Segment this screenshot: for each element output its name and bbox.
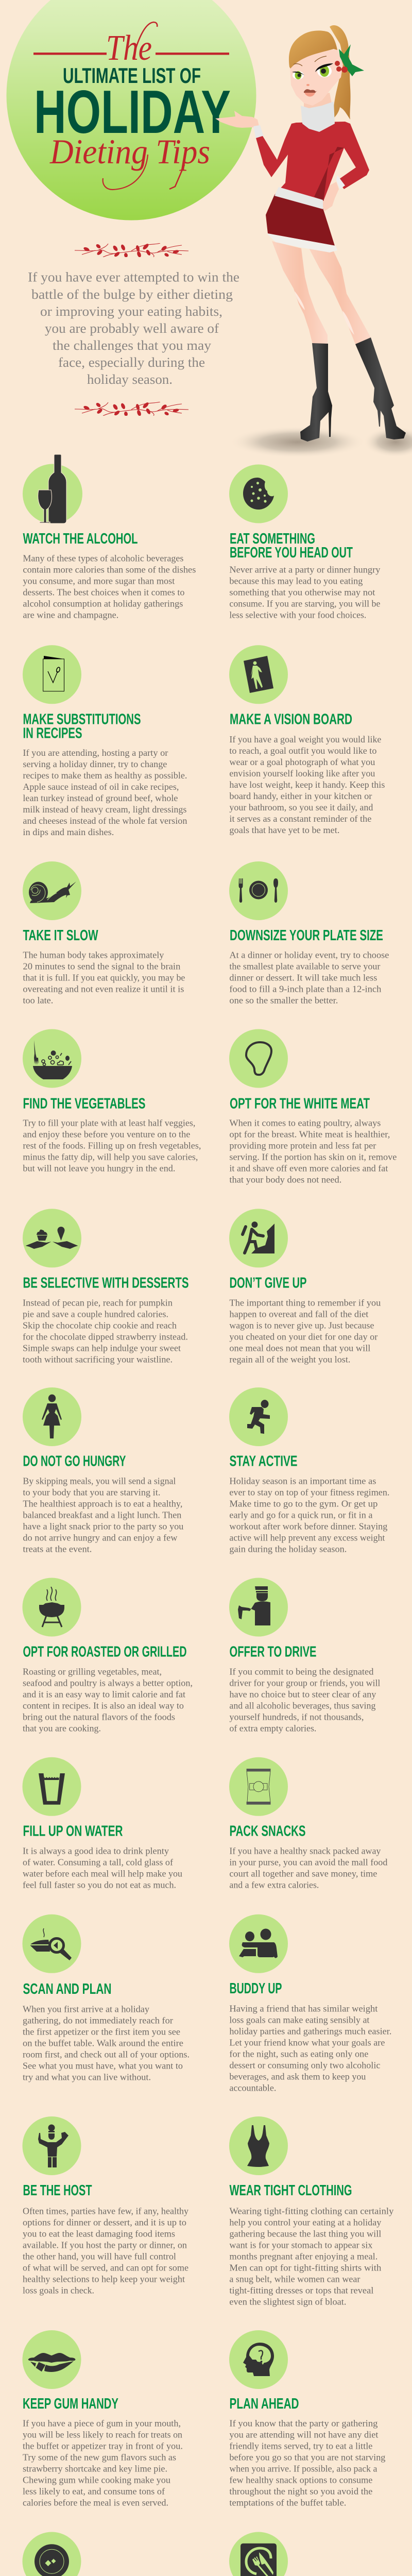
icon: plate with two bites (23, 2532, 81, 2576)
body text: do not arrive hungry and can enjoy a few (23, 1532, 177, 1543)
heading: OPT FOR ROASTED OR GRILLED (23, 1644, 186, 1660)
icon: cookie (229, 465, 288, 523)
intro paragraph: you are probably well aware of (45, 321, 219, 336)
body text: It is always a good idea to drink plenty (23, 1845, 169, 1856)
body text (229, 1666, 380, 1733)
body text: alcohol consumption at holiday gatherings (23, 599, 183, 609)
heading: BEFORE YOU HEAD OUT (230, 545, 353, 561)
neck (304, 93, 332, 108)
panel: take the 2-bite approach (23, 2532, 182, 2576)
body text: on the buffet table. Walk around the entire (23, 2038, 183, 2048)
body text: holiday parties and gatherings much easier. (229, 2026, 391, 2036)
heading (23, 711, 141, 742)
body text (23, 553, 196, 620)
body text: early and go for a quick run, or fit in a (229, 1510, 372, 1520)
body text: lean turkey instead of ground beef, whole (23, 793, 178, 803)
icon: hands with cupcake and ice cream (23, 1209, 81, 1267)
icon: head with brain and question mark (229, 2330, 288, 2389)
heading: DO NOT GO HUNGRY (23, 1453, 126, 1470)
title oval (6, 0, 256, 221)
panel: use a calorie-tracking app (229, 2532, 397, 2576)
body text: and it is an easy way to limit calorie and fat (23, 1689, 185, 1699)
icon: steaming grill (23, 1578, 81, 1636)
body text: the first appetizer or the first item you see (23, 2026, 180, 2037)
body text: less likely to eat, and consume tons of (23, 2486, 165, 2496)
body text: calories before the meal is even served. (23, 2497, 168, 2507)
body text (229, 565, 380, 620)
heading: SCAN AND PLAN (23, 1981, 111, 1997)
body text: happen to overeat and fall of the diet (229, 1309, 368, 1319)
intro paragraph: face, especially during the (58, 355, 205, 370)
body text: you are attending will not have any diet (229, 2429, 378, 2439)
body text (229, 1476, 389, 1554)
body text: The human body takes approximately (23, 950, 164, 960)
body text: have lost weight, keep it handy. Keep this (229, 779, 385, 790)
body text: Let your friend know what your goals are (229, 2037, 385, 2047)
body text (23, 1297, 188, 1364)
panel: buddy up (229, 1914, 391, 2093)
icon: woman silhouette (23, 1387, 81, 1446)
body text: wagon is to never give up. Just because (229, 1320, 374, 1330)
body text: because this may lead to you eating (229, 576, 363, 586)
icon: drumstick outline (229, 1029, 288, 1088)
body text (229, 1297, 381, 1364)
body text: Many of these types of alcoholic beverages (23, 553, 183, 564)
body text: driver for your group or friends, you will (229, 1677, 380, 1688)
heading: DON’T GIVE UP (230, 1275, 307, 1291)
body text (23, 950, 185, 1006)
body text: your bathroom, so you see it daily, and (229, 802, 373, 812)
face (290, 49, 343, 106)
body text: See what you must have, what you want to (23, 2060, 183, 2071)
panel: take it slow (23, 861, 185, 1006)
body text (23, 2206, 188, 2295)
panel: watch the alcohol (23, 454, 196, 620)
body text (23, 2418, 183, 2507)
body text: something that you otherwise may not (229, 587, 375, 598)
panel: make substitutions in recipes (23, 645, 187, 837)
body text: court all together and save money, time (229, 1868, 377, 1878)
body text: Make time to go to the gym. Or get up (229, 1498, 377, 1509)
icon: chauffeur (229, 1578, 288, 1636)
body text: The healthiest approach is to eat a healthy, (23, 1498, 182, 1509)
heading: MAKE SUBSTITUTIONS (23, 711, 141, 728)
body text (229, 2003, 391, 2093)
body text: contain more calories than some of the dishes (23, 565, 196, 575)
heading: FILL UP ON WATER (23, 1823, 123, 1840)
panel: don't give up (229, 1209, 381, 1364)
body text: regain all of the weight you lost. (229, 1354, 350, 1364)
body text: you will be less likely to reach for treats on (23, 2429, 182, 2439)
hair (289, 30, 337, 69)
body text: board handy, either in your kitchen or (229, 791, 372, 801)
body text: water before each meal will help make you (23, 1868, 182, 1878)
heading (230, 531, 353, 561)
panel: stay active (229, 1387, 389, 1554)
body text: If you have a goal weight you would like (229, 734, 381, 744)
body text: when you arrive. If possible, also pack a (229, 2463, 377, 2473)
body text (229, 950, 389, 1006)
body text: Never arrive at a party or dinner hungry (229, 565, 380, 575)
panel: fill up on water (23, 1757, 182, 1890)
body text: a snug belt, while women can wear (229, 2274, 360, 2284)
body text: If you commit to being the designated (229, 1666, 373, 1676)
right hand on hip (322, 182, 339, 211)
heading: BE THE HOST (23, 2182, 92, 2199)
icon: two friends (229, 1914, 288, 1973)
body text: The important thing to remember if you (229, 1297, 381, 1308)
title: The: The (106, 28, 152, 68)
body text (229, 2206, 393, 2307)
body text: serving a holiday dinner, try to change (23, 759, 167, 769)
body text: envision yourself looking like after you (229, 768, 375, 778)
body text: tooth without sacrificing your waistline. (23, 1354, 173, 1364)
panel: find the vegetables (23, 1029, 201, 1174)
body text: Wearing tight-fitting clothing can certainly (229, 2206, 393, 2216)
heading: FIND THE VEGETABLES (23, 1096, 145, 1112)
panel: opt for roasted or grilled (23, 1578, 193, 1733)
body text: If you are attending, hosting a party or (23, 748, 168, 758)
nose and lips (306, 84, 310, 86)
intro paragraph: holiday season. (87, 372, 173, 387)
panel: make a vision board (229, 645, 385, 835)
body text: consume. If you are starving, you will be (229, 599, 380, 609)
icon: tight top (229, 2116, 288, 2175)
panel: do not go hungry (23, 1387, 183, 1554)
body text: options for dinner or dessert, and it is up to (23, 2217, 186, 2227)
illustration: woman in red holiday dress (215, 25, 412, 458)
body text: in your purse, you can avoid the mall food (229, 1857, 387, 1867)
icon: plate with fork and spoon (229, 861, 288, 920)
body text: the buffet or appetizer tray in front of you. (23, 2441, 183, 2451)
body text: When you first arrive at a holiday (23, 2004, 149, 2014)
body text: Roasting or grilling vegetables, meat, (23, 1666, 162, 1676)
body text: If you have a healthy snack packed away (229, 1845, 381, 1856)
body text (229, 2418, 385, 2507)
body text: If you have a piece of gum in your mouth, (23, 2418, 181, 2428)
title block: green oval with title (6, 0, 256, 221)
eyes and brows (317, 65, 332, 77)
body text: Often times, parties have few, if any, healthy (23, 2206, 188, 2216)
body text: At a dinner or holiday event, try to choose (229, 950, 389, 960)
body text: Apple sauce instead of oil in cake recipes, (23, 782, 179, 792)
heading: PACK SNACKS (230, 1823, 306, 1840)
body text: recipes to make them as healthy as possible. (23, 770, 187, 781)
body text: have a light snack prior to the party so you (23, 1521, 183, 1531)
body text: milk instead of heavy cream, light dressings (23, 804, 186, 815)
body text: one so the smaller the better. (229, 995, 338, 1006)
body text: Simple swaps can help indulge your sweet (23, 1343, 181, 1353)
panel: downsize your plate size (229, 861, 389, 1006)
intro paragraph: the challenges that you may (53, 338, 211, 353)
icon: app tile with plate and cutlery (229, 2532, 288, 2576)
body text (23, 1118, 201, 1174)
body text: goals that have yet to be met. (229, 825, 339, 835)
intro paragraph: or improving your eating habits, (40, 304, 222, 319)
heading: KEEP GUM HANDY (23, 2396, 118, 2412)
body text: pie and save a couple hundred calories. (23, 1309, 168, 1319)
body text: friendly items served, try to eat a little (229, 2441, 372, 2451)
icon: lips with gum (23, 2330, 81, 2389)
body text: food to fill a 9-inch plate than a 12-inch (229, 984, 381, 994)
title: Dieting Tips (49, 132, 210, 190)
body text: By skipping meals, you will send a signal (23, 1476, 176, 1486)
panel: opt for the white meat (229, 1029, 397, 1185)
body text: of what will be served, and can opt for some (23, 2262, 188, 2273)
body text: gathering because the last thing you will (229, 2228, 381, 2239)
body text: want is for your stomach to appear six (229, 2240, 372, 2250)
body text: months pregnant after enjoying a meal. (229, 2251, 377, 2261)
body text: to reach, a goal outfit you would like to (229, 745, 376, 756)
heading: BE SELECTIVE WITH DESSERTS (23, 1275, 188, 1291)
panel: eat something before you head out (229, 465, 380, 620)
holly (339, 44, 364, 76)
body text: it and shave off even more calories and fat (229, 1163, 388, 1174)
body text: for the night, such as eating only one (229, 2048, 368, 2059)
body text: room first, and check out all of your options. (23, 2049, 190, 2059)
body text: Holiday season is an important time as (229, 1476, 376, 1486)
title: Dieting Tips: Dieting Tips (49, 132, 210, 171)
left hand (215, 111, 259, 128)
body text: ever to stay on top of your fitness regimen. (229, 1487, 389, 1497)
body text: you cheated on your diet for one day or (229, 1331, 377, 1342)
title: The (33, 22, 229, 68)
ornament: laurel below intro (75, 401, 188, 417)
body text: bring out the natural flavors of the foods (23, 1711, 175, 1722)
body text: available. If you host the party or dinner, on (23, 2240, 187, 2250)
body text (229, 734, 385, 835)
body text: and all alcoholic beverages, thus saving (229, 1700, 375, 1710)
body text: wear or a goal photograph of what you (229, 757, 375, 767)
heading: WEAR TIGHT CLOTHING (230, 2182, 352, 2199)
body text: of water. Consuming a tall, cold glass of (23, 1857, 173, 1867)
body text: it serves as a constant reminder of the (229, 814, 371, 824)
icon: hiker climbing a rock (229, 1209, 288, 1267)
body text: Men can opt for tight-fitting shirts with (229, 2262, 381, 2273)
body text: gathering, do not immediately reach for (23, 2015, 173, 2025)
body text: dinner or dessert. It will take much less (229, 973, 377, 983)
body text: Skip the chocolate chip cookie and reach (23, 1320, 177, 1330)
body text: to your body that you are starving it. (23, 1487, 160, 1497)
body text: content in recipes. It is also an ideal way to (23, 1700, 184, 1710)
heading: BUDDY UP (230, 1980, 282, 1997)
ornament: laurel top (75, 243, 188, 258)
body text: throughout the night so you avoid the (229, 2486, 372, 2496)
body text: yourself hundreds, if not thousands, (229, 1711, 364, 1722)
panel: pack snacks (229, 1757, 387, 1890)
heading: TAKE IT SLOW (23, 927, 98, 944)
body text (23, 1845, 182, 1890)
body text: few healthy snack options to consume (229, 2475, 372, 2485)
boots (300, 343, 332, 442)
body text: Try some of the new gum flavors such as (23, 2452, 176, 2462)
body text: before you go so that you are not starving (229, 2452, 385, 2462)
panel: wear tight clothing (229, 2116, 393, 2307)
floor shadows (244, 430, 352, 454)
ponytail (330, 25, 351, 120)
body text: and enjoy these before you venture on to the (23, 1129, 190, 1140)
body text: you to eat the least damaging food items (23, 2228, 175, 2239)
body text: active will help prevent any excess weight (229, 1532, 385, 1543)
red sweater (256, 122, 369, 201)
body text: help you control your eating at a holiday (229, 2217, 381, 2227)
heading: EAT SOMETHING (230, 531, 315, 547)
legs (272, 241, 328, 344)
heading: WATCH THE ALCOHOL (23, 531, 138, 547)
body text: balanced breakfast and a light lunch. Then (23, 1510, 181, 1520)
body text: and a few extra calories. (229, 1879, 319, 1890)
body text: If you know that the party or gathering (229, 2418, 377, 2428)
body text: overeating and not even realize it until it is (23, 984, 184, 994)
title: Holiday: HOLIDAY (34, 78, 231, 146)
body text (229, 1118, 397, 1185)
icon: menu (23, 645, 81, 704)
body text: less selective with your food choices. (229, 610, 366, 620)
body text: serving. If the portion has skin on it, remove (229, 1152, 397, 1162)
body text (229, 1845, 387, 1890)
body text: tight-fitting dresses or tops that reveal (229, 2285, 373, 2295)
body text: try and what you can live without. (23, 2072, 151, 2082)
body text (23, 1476, 183, 1554)
body text: When it comes to eating poultry, always (229, 1118, 381, 1128)
icon: vision board (229, 645, 288, 704)
body text: you consume, and more sugar than most (23, 576, 175, 586)
intro paragraph: If you have ever attempted to win the (28, 270, 239, 285)
body text: healthy selections to help keep your weight (23, 2274, 185, 2284)
body text: Instead of pecan pie, reach for pumpkin (23, 1297, 173, 1308)
body text: are wine and champagne. (23, 610, 118, 620)
icon: pie under magnifier (23, 1914, 81, 1973)
panel: keep gum handy (23, 2330, 183, 2507)
icon: runner (229, 1387, 288, 1446)
body text: seafood and poultry is always a better option, (23, 1677, 193, 1688)
body text: minus the fatty dip, will help you save calories, (23, 1152, 198, 1162)
body text: loss goals in check. (23, 2285, 94, 2295)
body text: providing more protein and less fat per (229, 1141, 376, 1151)
body text: desserts. The best choices when it comes to (23, 587, 184, 598)
body text (23, 2004, 190, 2082)
body text: temptations of the buffet table. (229, 2497, 346, 2507)
body text: 20 minutes to send the signal to the brain (23, 961, 180, 972)
body text: opt for the breast. White meat is healthier, (229, 1129, 390, 1140)
intro paragraph: battle of the bulge by either dieting (31, 287, 233, 302)
heading: PLAN AHEAD (230, 2396, 299, 2412)
body text: feel full faster so you do not eat as much. (23, 1879, 176, 1890)
body text: Having a friend that has similar weight (229, 2003, 377, 2013)
body text (23, 1666, 193, 1733)
icon: wine bottle and glass (23, 454, 82, 523)
body text: Try to fill your plate with at least half veggies, (23, 1118, 195, 1128)
body text: workout after work before dinner. Staying (229, 1521, 387, 1531)
icon: glass of water (23, 1757, 81, 1816)
turtleneck collar (301, 101, 335, 132)
panel: plan ahead (229, 2330, 385, 2507)
panel: offer to drive (229, 1578, 380, 1733)
heading: STAY ACTIVE (230, 1453, 298, 1470)
body text: that your body does not need. (229, 1175, 341, 1185)
heading: IN RECIPES (23, 725, 82, 742)
body text: the smallest plate available to serve your (229, 961, 380, 972)
body text: the other hand, you will have full control (23, 2251, 176, 2261)
body text: Chewing gum while cooking make you (23, 2475, 170, 2485)
body text: one meal does not mean that you will (229, 1343, 370, 1353)
heading: MAKE A VISION BOARD (230, 711, 352, 728)
panel: be the host (23, 2116, 188, 2295)
body text: treats at the event. (23, 1544, 92, 1554)
panel: scan and plan (23, 1914, 190, 2082)
body text: of extra empty calories. (229, 1723, 316, 1733)
body text: gain during the holiday season. (229, 1544, 347, 1554)
intro paragraph (28, 270, 239, 387)
body text: even the slightest sign of bloat. (229, 2296, 346, 2307)
body text: that you are cooking. (23, 1723, 101, 1733)
heading: OFFER TO DRIVE (230, 1644, 316, 1660)
body text: that it is full. If you eat quickly, you may be (23, 973, 185, 983)
body text: loss goals can make eating sensibly at (229, 2014, 369, 2025)
body text: accountable. (229, 2082, 276, 2093)
body text: strawberry shortcake and key lime pie. (23, 2463, 167, 2473)
skirt (266, 195, 335, 246)
icon: salad bowl and fork (23, 1029, 81, 1088)
panel: be selective with desserts (23, 1209, 188, 1364)
body text: but will not leave you hungry in the end. (23, 1163, 175, 1174)
body text: dessert or consuming only two alcoholic (229, 2060, 380, 2070)
title: Ultimate List Of: ULTIMATE LIST OF (63, 63, 201, 88)
body text: too late. (23, 995, 53, 1006)
body text: have no choice but to steer clear of any (229, 1689, 376, 1699)
body text: beverages, and ask them to keep you (229, 2071, 366, 2081)
waistband (274, 187, 323, 209)
sleeve cuff right (336, 175, 345, 189)
body text: for the chocolate dipped strawberry instead. (23, 1331, 188, 1342)
icon: snail (23, 861, 81, 920)
icon: chef (23, 2116, 81, 2175)
icon: snack pack (229, 1757, 288, 1816)
body text: in dips and main dishes. (23, 827, 114, 837)
body text: and cheeses instead of the whole fat version (23, 816, 187, 826)
body text: rest of the foods. Filling up on fresh vegetables, (23, 1141, 201, 1151)
sleeve cuff (253, 125, 264, 139)
body text (23, 748, 187, 837)
